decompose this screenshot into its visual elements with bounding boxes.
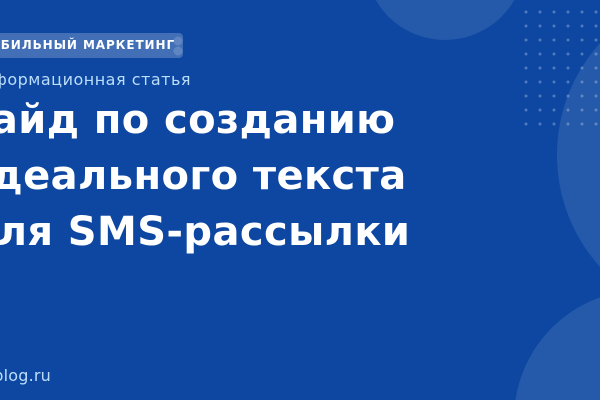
title <box>0 97 410 255</box>
category badge <box>0 33 183 58</box>
